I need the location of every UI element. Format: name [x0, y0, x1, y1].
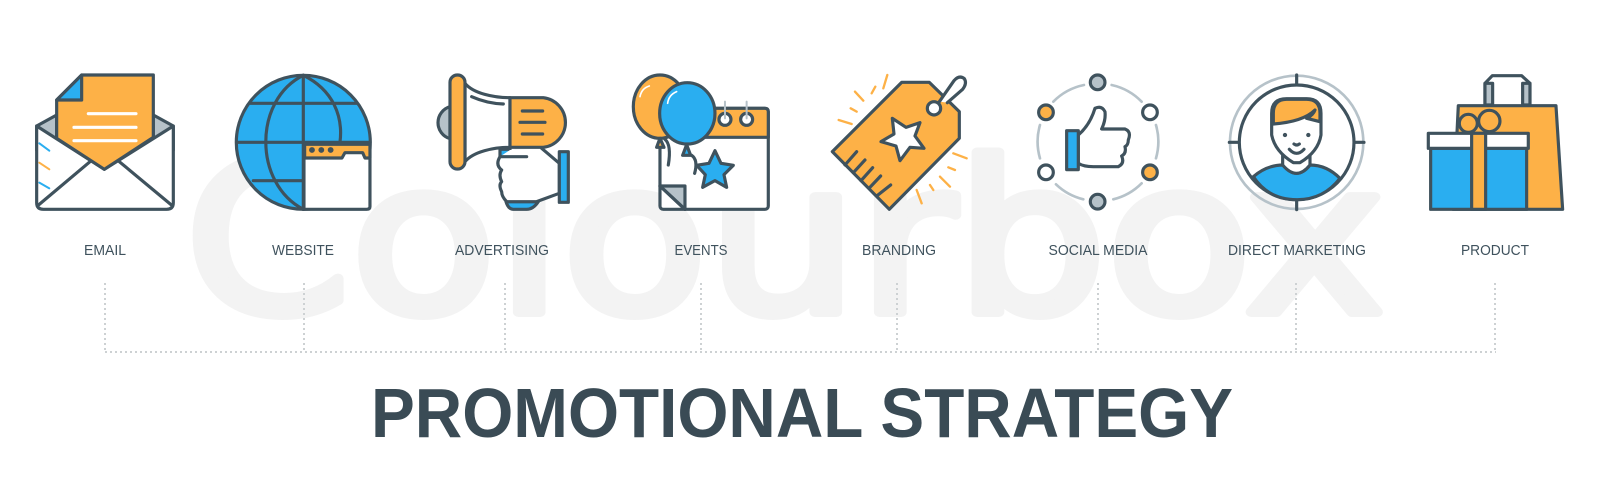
icon: email envelope — [37, 75, 173, 209]
label: product: PRODUCT — [1461, 242, 1529, 259]
dotted connector lines — [105, 283, 1496, 352]
label: email: EMAIL — [84, 242, 126, 259]
label: advertising: ADVERTISING — [455, 242, 549, 259]
label: events: EVENTS — [674, 242, 728, 259]
label: branding: BRANDING — [862, 242, 936, 259]
label: direct marketing: DIRECT MARKETING — [1228, 242, 1366, 259]
label: social media: SOCIAL MEDIA — [1048, 242, 1148, 259]
icon: social media thumbs up — [1038, 75, 1158, 209]
icon: branding price tag — [832, 75, 967, 209]
icon: direct marketing target person — [1229, 75, 1364, 210]
icon: events calendar and balloons — [633, 75, 768, 209]
title: PROMOTIONAL STRATEGY — [371, 374, 1233, 452]
watermark: Colourbox — [185, 117, 1385, 362]
icon: megaphone advertising — [438, 75, 568, 209]
icon: website globe — [236, 75, 370, 209]
label: website: WEBSITE — [272, 242, 334, 259]
icon: product bag and gift — [1428, 76, 1563, 209]
